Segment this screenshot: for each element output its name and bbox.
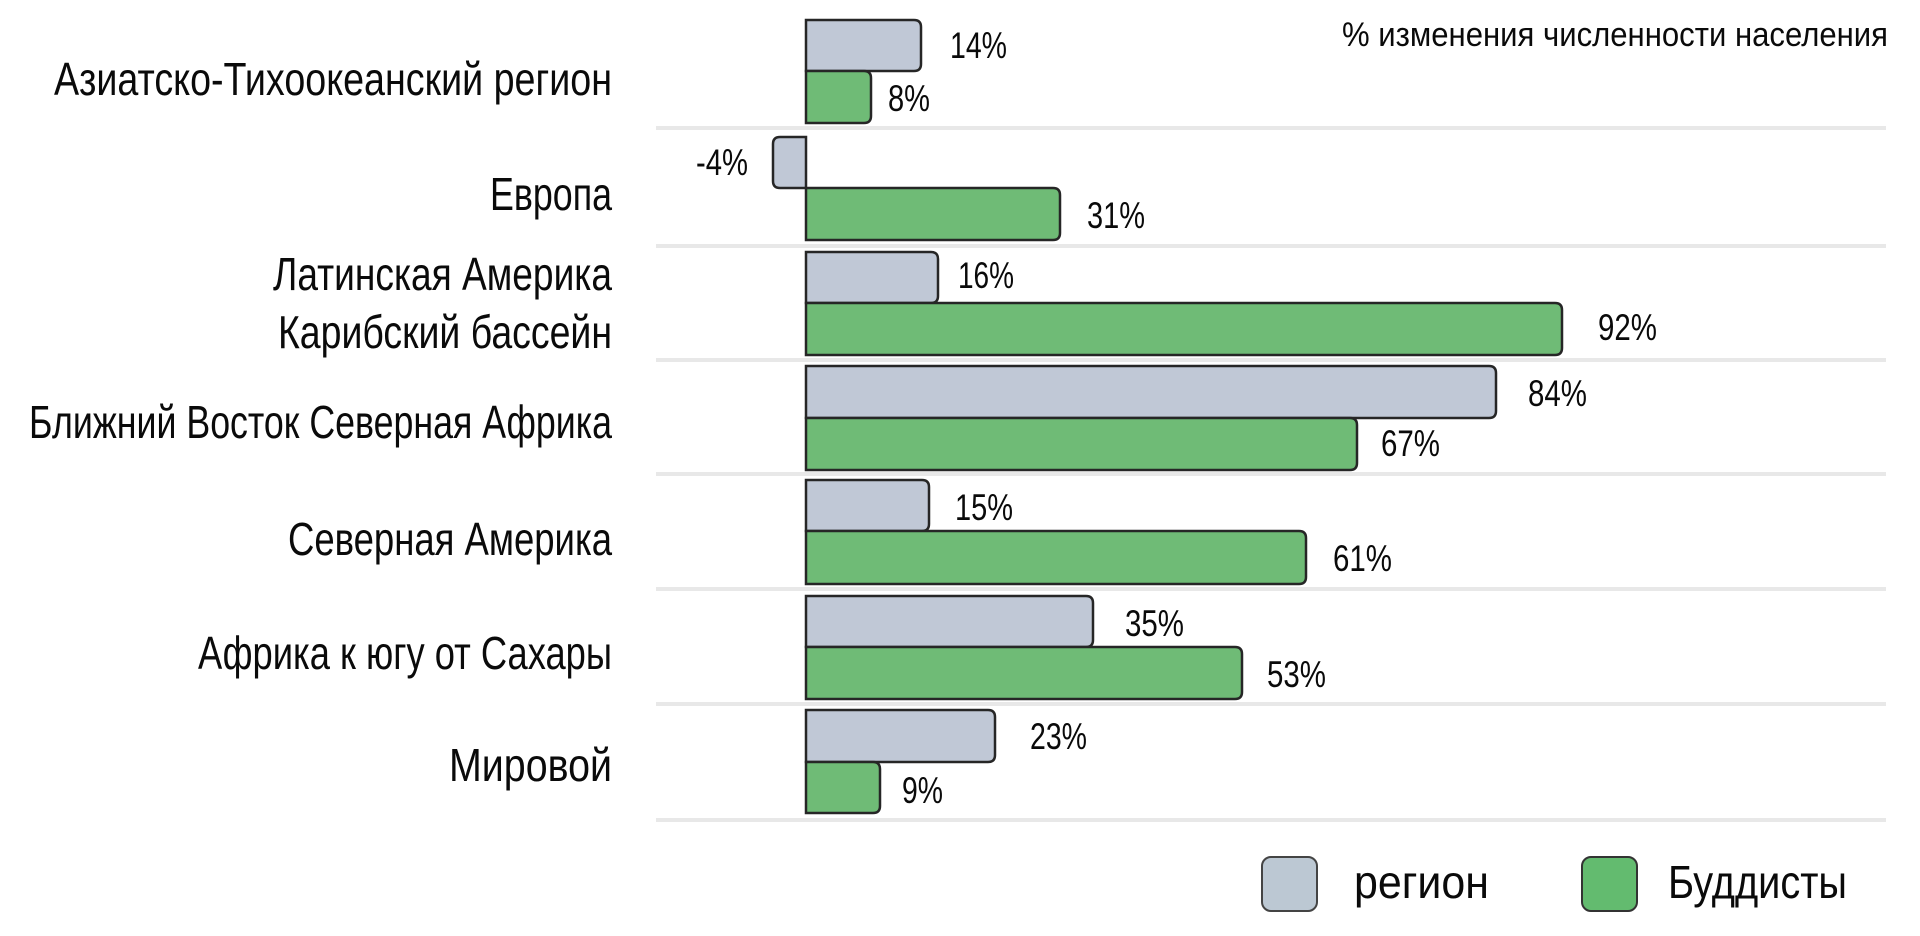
row: Asia-Pacific — [54, 20, 1007, 123]
legend item: region: регион — [1354, 856, 1489, 908]
row: Sub-Saharan Africa — [198, 596, 1326, 699]
row: Europe: -4% — [696, 142, 748, 183]
row: Latin America and Caribbean: 92% — [1598, 307, 1657, 348]
row: Latin America and Caribbean: Карибский бассейн — [278, 306, 612, 358]
row: Middle East and North Africa: 67% — [1381, 423, 1440, 464]
row: Asia-Pacific: 14% — [950, 25, 1007, 66]
row: North America: 15% — [955, 487, 1013, 528]
row: World: 23% — [1030, 716, 1087, 757]
row: World: Мировой — [449, 739, 612, 791]
row: Europe: 31% — [1087, 195, 1145, 236]
row: Latin America and Caribbean: Латинская Америка — [273, 248, 612, 300]
row: Sub-Saharan Africa: Африка к югу от Сахары — [198, 627, 612, 679]
row: Europe — [490, 137, 1145, 240]
row: North America: Северная Америка — [288, 513, 612, 565]
row: Latin America and Caribbean: 16% — [958, 255, 1014, 296]
legend item: Buddhists: Буддисты — [1668, 856, 1847, 908]
row: Middle East and North Africa: Ближний Восток Северная Африка — [29, 396, 612, 448]
row: World — [449, 710, 1087, 813]
row: Europe: Европа — [490, 168, 612, 220]
row: Middle East and North Africa — [29, 366, 1587, 470]
legend item: region — [1262, 856, 1489, 911]
row: North America — [288, 480, 1392, 584]
legend item: Buddhists — [1582, 856, 1847, 911]
row: North America: 61% — [1333, 538, 1392, 579]
row: Middle East and North Africa: 84% — [1528, 373, 1587, 414]
row: Asia-Pacific: Азиатско-Тихоокеанский регион — [54, 53, 612, 105]
row: Latin America and Caribbean — [273, 248, 1657, 358]
row: Sub-Saharan Africa: 35% — [1125, 603, 1184, 644]
row: World: 9% — [902, 770, 943, 811]
row: Asia-Pacific: 8% — [888, 78, 930, 119]
row: Sub-Saharan Africa: 53% — [1267, 654, 1326, 695]
legend — [1262, 856, 1847, 911]
